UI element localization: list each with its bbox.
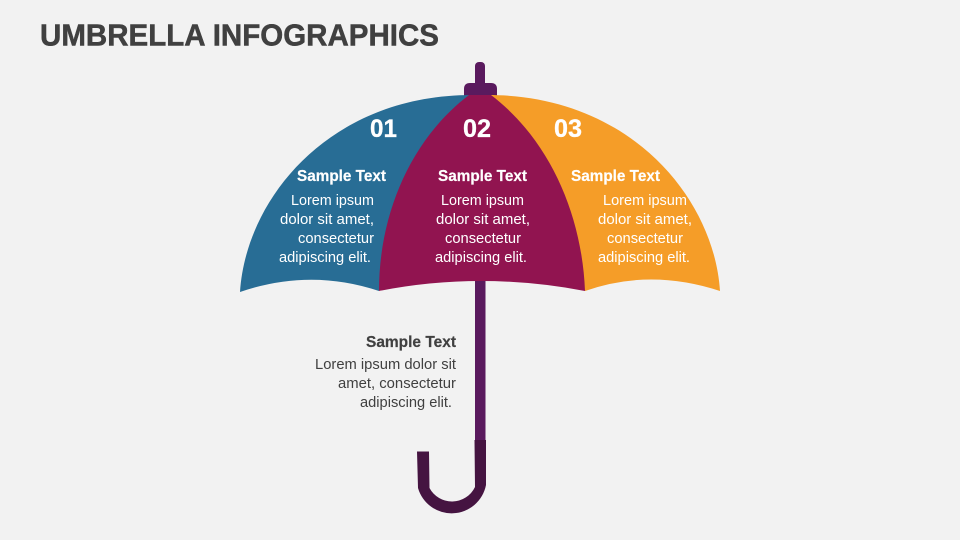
text block 03 bbox=[598, 193, 692, 266]
number 03: 03 bbox=[554, 115, 582, 143]
text block 03: Lorem ipsum bbox=[603, 193, 687, 209]
callout body bbox=[315, 357, 456, 411]
text block 02: Lorem ipsum bbox=[441, 193, 524, 209]
panel 03: orange canopy section bbox=[488, 95, 720, 291]
callout body: amet, consectetur bbox=[338, 376, 456, 392]
callout heading: Sample Text bbox=[366, 334, 457, 351]
callout body: Lorem ipsum dolor sit bbox=[315, 357, 456, 373]
heading 03: Sample Text bbox=[571, 168, 661, 185]
text block 01 bbox=[279, 193, 374, 266]
umbrella shaft bbox=[475, 275, 486, 445]
title: UMBRELLA INFOGRAPHICS bbox=[40, 18, 439, 52]
panel 02: magenta canopy section bbox=[379, 95, 585, 291]
text block 01: consectetur bbox=[298, 231, 374, 247]
text block 01: dolor sit amet, bbox=[280, 212, 374, 228]
callout: handle text bbox=[315, 334, 457, 411]
text block 01: Lorem ipsum bbox=[291, 193, 374, 209]
text block 02: dolor sit amet, bbox=[436, 212, 530, 228]
text block 01: adipiscing elit. bbox=[279, 250, 371, 266]
text block 03: consectetur bbox=[607, 231, 683, 247]
umbrella top finial bbox=[464, 62, 497, 97]
heading 01: Sample Text bbox=[297, 168, 387, 185]
text block 03: dolor sit amet, bbox=[598, 212, 692, 228]
umbrella hook handle bbox=[417, 440, 486, 513]
text block 02 bbox=[435, 193, 530, 266]
number 02: 02 bbox=[463, 115, 491, 143]
text block 02: consectetur bbox=[445, 231, 521, 247]
panel 01: blue canopy section bbox=[240, 95, 472, 292]
callout body: adipiscing elit. bbox=[360, 395, 452, 411]
text block 03: adipiscing elit. bbox=[598, 250, 690, 266]
heading 02: Sample Text bbox=[438, 168, 528, 185]
text block 02: adipiscing elit. bbox=[435, 250, 527, 266]
number 01: 01 bbox=[370, 115, 397, 143]
